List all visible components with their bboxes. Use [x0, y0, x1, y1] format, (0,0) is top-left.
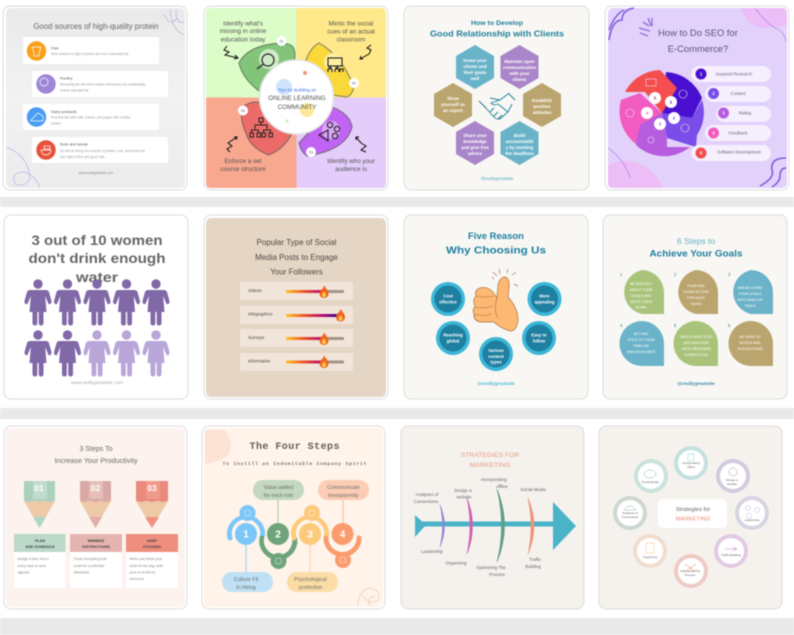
labels: Psychological	[294, 577, 327, 583]
ring nodes: offline	[687, 465, 695, 469]
step labels: cues of an actual	[327, 28, 375, 36]
numbered nodes: 2	[275, 530, 281, 540]
hexagons: an expert	[443, 108, 464, 113]
ring nodes: Traffic Building	[721, 553, 741, 557]
cycle wheel	[619, 70, 704, 156]
hexagons: communication	[503, 65, 536, 70]
petal: purple	[299, 107, 352, 156]
row: dairy: Dairy products	[51, 109, 77, 114]
drop shapes: SET AND	[634, 332, 649, 336]
number badges: 01	[280, 40, 283, 44]
list pills: 5	[700, 150, 703, 156]
hexagons: attitudes	[533, 110, 552, 115]
step labels: education today	[221, 36, 266, 44]
center label	[658, 499, 727, 528]
list pills: 3	[722, 110, 725, 116]
drop shapes: ABOUT YOUR	[629, 288, 653, 292]
drop shapes: TASKS	[690, 302, 702, 306]
number badges	[238, 36, 359, 157]
connector stems	[246, 498, 343, 574]
heading: Media Posts to Engage	[255, 253, 338, 262]
cycle wheel: 4	[646, 110, 649, 116]
panel: SEO for e-commerce: E-Commerce?	[668, 43, 728, 54]
step box: keep focused: tomorrow	[130, 577, 145, 581]
panel: the four steps	[202, 426, 385, 609]
numbered nodes: 1	[243, 530, 249, 540]
step box: minimize distractions: Close everything that	[74, 557, 106, 561]
ring nodes: Organizing	[643, 555, 658, 559]
ring nodes: Incorporating	[682, 461, 700, 465]
drop shapes: STICK TO YOUR	[627, 338, 655, 342]
list pills: Software Development	[717, 150, 762, 154]
icon: burst	[639, 18, 652, 36]
rib labels: Design a	[454, 488, 472, 493]
row: dairy	[23, 104, 159, 130]
hexagons	[434, 45, 561, 165]
hexagons: their goals	[464, 70, 487, 75]
step box: minimize distractions: DISTRACTIONS	[82, 545, 110, 549]
ring nodes: Social Media	[641, 480, 659, 484]
panel: women water statistic	[4, 215, 188, 399]
panel: three steps productivity	[4, 426, 187, 609]
heading: How to Develop	[471, 20, 523, 27]
icon: magnifier	[257, 49, 279, 69]
drop shapes: 1	[620, 272, 623, 277]
website footer: www.reallygreatsite.com	[71, 380, 123, 386]
rib labels: Traffic	[529, 557, 542, 562]
reason circles: effective	[439, 300, 457, 304]
drop shapes: PLAN AND	[687, 284, 705, 288]
labels: transparently	[328, 493, 359, 499]
pencil: 03	[136, 481, 168, 528]
list pills: Feedback	[729, 130, 748, 136]
icon: megaphone group	[319, 121, 340, 141]
reason circles: follow	[533, 338, 546, 344]
panel: three steps productivity: Increase Your Productivity	[54, 456, 138, 465]
panel: five reasons	[404, 215, 588, 399]
step labels: Enforce a set	[224, 158, 262, 165]
ring nodes: Optimizing The	[680, 569, 700, 573]
reason circles: More	[539, 294, 550, 298]
drop shapes: COMPLETION	[684, 353, 708, 357]
hexagons: Know your	[463, 58, 487, 63]
ring nodes: Conversions	[622, 515, 639, 519]
step labels	[220, 20, 375, 173]
rib labels: Conversions	[414, 499, 439, 504]
icon: thumbs up	[473, 269, 518, 331]
reason circles: appealing	[534, 300, 555, 304]
panel: marketing strategy ring	[599, 426, 782, 609]
heading: 3 out of 10 women	[32, 232, 162, 248]
page background bands	[0, 197, 794, 635]
row: poultry: Removing the skin from chicken and turkey can substantially	[60, 82, 146, 86]
labels: Value-added	[264, 485, 293, 491]
icon: handshake	[479, 93, 515, 119]
drop shapes: YOUR GOALS	[738, 292, 762, 296]
footer handle: @reallygreatsite	[481, 176, 514, 181]
rib labels: Analyses of	[416, 492, 439, 497]
heading: How to Do SEO for	[658, 27, 738, 38]
heading: 3 Steps To	[80, 446, 113, 453]
rib labels: Social Media	[520, 487, 546, 492]
row: dairy: protein.	[51, 122, 62, 126]
reason circles	[431, 282, 562, 371]
serpentine arcs	[229, 517, 359, 557]
drop shapes: TIMELINE	[633, 344, 650, 348]
row: poultry	[32, 71, 168, 97]
small icon circles	[240, 505, 351, 569]
hexagons: clients	[512, 77, 527, 82]
reason circles: Easy to	[531, 332, 547, 338]
heading: Five Reason	[468, 231, 524, 241]
bar rows: Surveys	[248, 335, 265, 340]
labels: protection	[299, 585, 322, 591]
reason circles: Reaching	[443, 332, 463, 338]
ring nodes: Analyses of	[622, 511, 638, 515]
heading: Popular Type of Social	[257, 238, 337, 247]
row: fish: Most seafood is high in protein and low in saturated fat.	[51, 52, 129, 56]
hexagons: Share your	[463, 133, 487, 138]
step labels: audience is	[335, 166, 367, 173]
step box: minimize distractions: could be a potential	[74, 564, 104, 568]
numbered nodes	[235, 523, 354, 545]
cycle wheel: 1	[670, 100, 673, 104]
step box: keep focused	[126, 534, 178, 588]
hexagons: the deadlines	[505, 151, 534, 156]
heading	[28, 232, 166, 285]
number badges: 04	[241, 109, 245, 113]
row: fish	[23, 37, 159, 64]
heading: don't drink enough	[28, 250, 166, 266]
step box: minimize distractions: MINIMIZE	[88, 539, 105, 543]
drop shapes: AND DEADLINES	[627, 350, 656, 354]
drop shapes: DOWN	[635, 306, 647, 310]
step labels: missing in online	[220, 28, 267, 35]
fishbone spine	[415, 502, 576, 550]
row: nuts and seeds	[32, 137, 168, 163]
list pills: Content	[730, 91, 746, 96]
panel: five reasons: Why Choosing Us	[446, 244, 546, 256]
step labels: course structure	[220, 166, 266, 173]
panel: marketing fishbone	[401, 426, 584, 609]
footer handle: @reallygreatsite	[677, 381, 715, 387]
drop shapes: SUGGESTIONS	[737, 347, 764, 351]
drop shapes: 2	[674, 272, 677, 277]
ring nodes: Leadership	[745, 518, 760, 522]
step box: plan and schedule: every task on your	[18, 564, 47, 568]
pencil: 02	[80, 481, 111, 528]
step labels: Identify who your	[327, 158, 375, 165]
list pills: 2	[712, 91, 715, 96]
drop shapes: ADVICE AND	[739, 341, 761, 345]
hexagons: Build	[514, 133, 525, 138]
step box: keep focused: When you finish your	[130, 557, 163, 561]
heading: Good sources of high-quality protein	[33, 22, 159, 31]
pencil: 01: 01	[34, 483, 44, 493]
panel: marketing fishbone: MARKETING	[470, 462, 510, 469]
step box: keep focused: work for the day, write	[130, 564, 164, 568]
row: nuts and seeds: also high in fibre and 'good' fats.	[60, 155, 106, 159]
center circle: COMMUNITY	[278, 104, 317, 111]
reason circles: Cost	[443, 294, 453, 298]
pencil: 01	[24, 481, 55, 528]
ring nodes: Process	[685, 573, 696, 577]
rib labels: Organizing	[445, 560, 467, 566]
labels: for each role	[264, 493, 293, 499]
hexagons: advice	[468, 151, 482, 156]
footer handle: @reallygreatsite	[477, 381, 515, 387]
hexagons: knowledge	[463, 139, 487, 144]
bar rows: Informative	[248, 358, 271, 364]
rib labels	[414, 477, 546, 577]
drop shapes: WRITE THEM	[630, 300, 652, 304]
rib labels: Leadership	[421, 549, 443, 554]
drop shapes: UNTIL REACHING	[681, 347, 711, 351]
list pills: 4	[712, 130, 715, 136]
drop shapes: 4	[620, 323, 623, 328]
drop shapes	[620, 270, 773, 366]
rib labels: Incorporating	[481, 477, 507, 482]
heading: STRATEGIES FOR	[461, 452, 519, 459]
step box: keep focused: KEEP	[147, 539, 158, 543]
rib labels: Building	[525, 564, 541, 569]
center circle	[260, 60, 334, 134]
step box: plan and schedule: agenda	[18, 570, 29, 574]
number badges: 02	[352, 82, 356, 86]
step box: minimize distractions	[70, 534, 122, 588]
row: poultry: reduce saturated fat.	[60, 88, 89, 92]
petal: red	[242, 102, 292, 155]
squiggle arrows	[224, 45, 371, 152]
rib labels: offline	[496, 484, 508, 489]
numbered nodes: 4	[340, 530, 346, 540]
drop shapes: 3	[728, 272, 731, 277]
step box: keep focused: FOCUSED	[143, 545, 161, 549]
step box: plan and schedule	[14, 534, 66, 588]
drop shapes: 5	[674, 323, 677, 328]
ring nodes: website	[727, 482, 737, 486]
reason circles: types	[490, 360, 502, 364]
hexagons: Establish	[532, 98, 552, 103]
labels	[222, 480, 369, 592]
panel: the four steps: To Instill an Indomitable Company Spirit	[222, 461, 367, 467]
ring nodes: Design a	[726, 478, 738, 482]
pictogram: women	[24, 279, 170, 376]
cycle wheel: 2	[673, 116, 676, 120]
drop shapes: BREAK DOWN	[738, 286, 762, 290]
list pills: Keyword Research	[716, 72, 753, 76]
row: fish: Fish	[51, 46, 59, 50]
labels: Communicate	[327, 485, 360, 491]
panel: achieve your goals	[603, 215, 787, 399]
hexagons: Maintain open	[504, 59, 535, 64]
center circle: Tips for Building an	[278, 88, 317, 92]
drop shapes: FOR EACH	[687, 296, 706, 300]
list pills	[691, 66, 771, 161]
bar rows	[240, 282, 353, 371]
reason circles: global	[447, 338, 459, 344]
hexagons: yourself as	[441, 102, 465, 107]
heading: 6 Steps to	[677, 236, 715, 246]
heading: water	[75, 269, 119, 285]
heading: Your Followers	[270, 268, 323, 276]
panel: social media post types	[204, 215, 388, 399]
bar rows: Infographics	[248, 312, 273, 316]
hexagons: well	[470, 76, 479, 81]
ring nodes	[615, 448, 767, 586]
row: nuts and seeds: Nuts and seeds	[60, 142, 88, 146]
petal: yellow	[306, 43, 354, 97]
drop shapes: DOWN ACTION	[683, 290, 709, 294]
step labels: classroom	[337, 36, 365, 44]
bar rows: Videos	[248, 288, 262, 293]
heading: The Four Steps	[250, 441, 340, 453]
drop shapes: BE SPECIFIC	[630, 282, 652, 286]
number badges: 03	[309, 150, 313, 154]
hexagons: positive	[533, 104, 551, 109]
step box: plan and schedule: PLAN	[35, 539, 45, 543]
website footer: www.reallygreatsite.com	[79, 171, 114, 175]
hexagons: Show	[447, 96, 459, 101]
step box: minimize distractions: distraction	[74, 570, 90, 574]
panel: online learning community	[204, 6, 388, 190]
reason circles: content	[488, 354, 504, 359]
hexagons: with your	[508, 71, 530, 76]
center label: Strategies for	[676, 507, 710, 513]
row: dairy: Products like skim milk, cheese, and yogurt offer healthy	[51, 116, 131, 120]
step box: plan and schedule: Assign a time slot to	[18, 557, 49, 561]
row: poultry: Poultry	[60, 76, 72, 80]
hexagons: clients and	[463, 64, 487, 69]
drop shapes: INTO SMALLER	[737, 298, 763, 302]
petal: green	[239, 43, 295, 93]
panel: SEO for e-commerce	[605, 6, 789, 190]
labels: Culture Fit	[234, 577, 259, 583]
rib labels: website	[457, 494, 472, 500]
heading	[255, 238, 338, 276]
cycle wheel: 3	[659, 122, 662, 126]
step labels: Identify what's	[223, 20, 263, 28]
hexagons: accountabilit	[506, 139, 534, 144]
reason circles: Various	[488, 348, 504, 353]
panel: good relationship with clients: Good Relationship with Clients	[430, 30, 564, 38]
list pills: Rating	[739, 110, 752, 116]
drop shapes: 6	[728, 323, 731, 328]
list pills: 1	[700, 72, 703, 76]
step box: keep focused: your to-do list for	[130, 570, 156, 574]
hexagons: y by meeting	[506, 145, 534, 150]
drop shapes: BE OPEN TO	[739, 335, 761, 339]
cycle wheel: 5	[654, 96, 657, 100]
rib labels: Optimizing The	[476, 565, 506, 570]
ribs	[440, 489, 534, 562]
pencil: 02: 02	[91, 483, 100, 493]
center label: MARKETING	[676, 516, 711, 522]
panel: good sources of protein	[3, 6, 187, 190]
hexagons: and give free	[461, 145, 489, 150]
numbered nodes: 3	[307, 530, 313, 540]
drop shapes: TAKE A FIRST STEP	[680, 335, 713, 339]
step box: plan and schedule: AND SCHEDULE	[25, 545, 55, 549]
panel: achieve your goals: Achieve Your Goals	[650, 248, 742, 260]
icon: org chart	[250, 118, 272, 137]
icon: presenter	[324, 53, 343, 72]
step labels: Mimic the social	[329, 20, 373, 28]
drop shapes: GOALS AND	[631, 294, 652, 298]
labels: In Hiring	[236, 585, 256, 591]
panel: good relationship with clients	[404, 6, 589, 190]
pencil: 03: 03	[147, 483, 157, 493]
center circle: ONLINE LEARNING	[268, 95, 326, 102]
drop shapes: AND ANOTHER	[683, 341, 709, 345]
rib labels: Process	[489, 572, 506, 577]
row: nuts and seeds: As well as being rich sources of protein, nuts, and seeds are	[60, 149, 145, 153]
drop shapes: TASKS	[744, 304, 756, 308]
